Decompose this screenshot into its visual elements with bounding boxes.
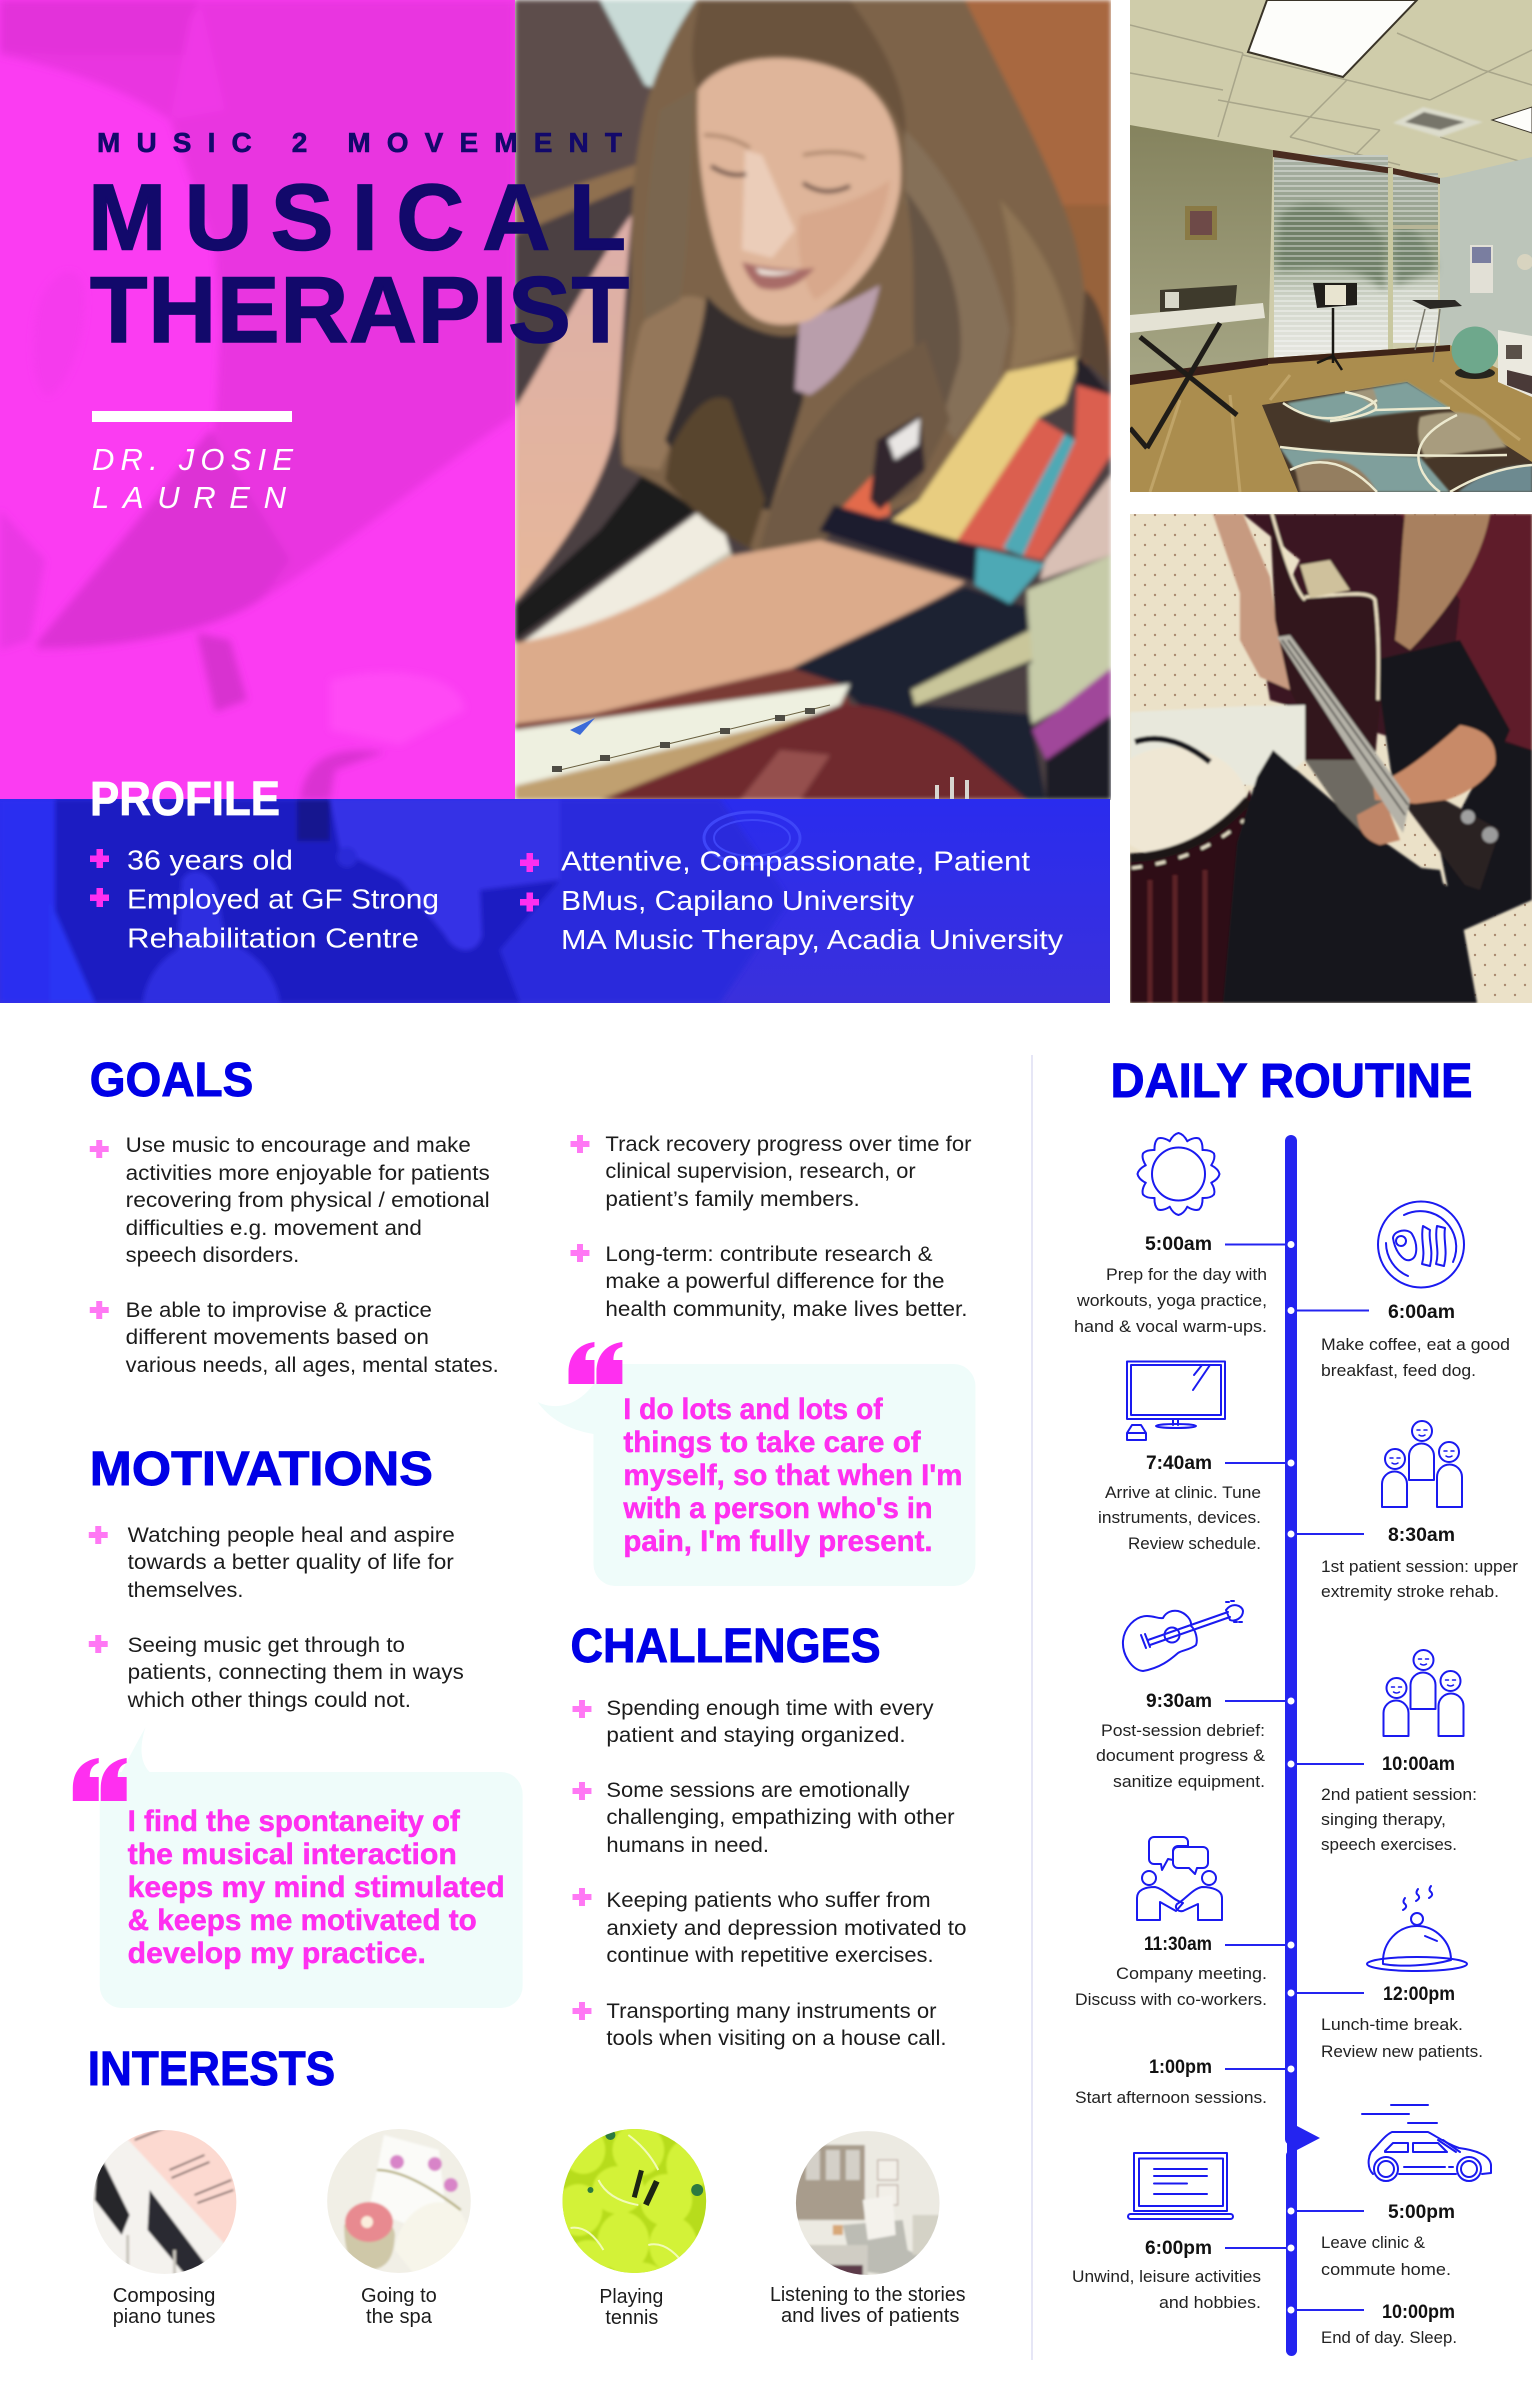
- heading: goals: GOALS: [90, 1054, 253, 1107]
- profile list: Employed at GF Strong: [127, 884, 439, 914]
- icon: meeting: [1137, 1837, 1222, 1920]
- item: 9:30am: [1096, 1691, 1266, 1791]
- item: 5:00pm: 5:00pm: [1388, 2202, 1455, 2223]
- profile list: Attentive, Compassionate, Patient: [561, 846, 1030, 876]
- item: 7:40am: Arrive at clinic. Tune: [1105, 1483, 1261, 1502]
- motivations list: patients, connecting them in ways: [128, 1661, 464, 1684]
- subtitle: MUSIC 2 MOVEMENT: [97, 127, 622, 158]
- panel: hero: [0, 0, 1111, 1003]
- item: 11:30am: Discuss with co-workers.: [1075, 1990, 1267, 2009]
- title: MUSICAL: [88, 164, 626, 270]
- item: 10:00pm: 10:00pm: [1382, 2302, 1455, 2323]
- profile list: Rehabilitation Centre: [127, 922, 419, 954]
- item: 5:00pm: commute home.: [1321, 2260, 1451, 2279]
- profile heading: PROFILE: [90, 773, 280, 826]
- item: 9:30am: document progress &: [1096, 1746, 1266, 1765]
- author name: DR. JOSIE: [92, 442, 293, 477]
- interest: stories: and lives of patients: [781, 2305, 959, 2327]
- quote: spontaneity: keeps my mind stimulated: [128, 1871, 505, 1904]
- goals list: Track recovery progress over time for: [605, 1133, 971, 1156]
- panel: daily routine: [1072, 1055, 1518, 2356]
- photo: therapy room: [1130, 0, 1532, 492]
- photo: woman playing autoharp: [515, 0, 1111, 800]
- item: 10:00am: speech exercises.: [1321, 1835, 1457, 1854]
- heading: challenges: CHALLENGES: [571, 1620, 881, 1673]
- icon: cloche: [1367, 1886, 1467, 1971]
- interest: spa: [324, 2125, 474, 2328]
- heading: motivations: MOTIVATIONS: [90, 1443, 433, 1496]
- panel: challenges: [571, 1620, 966, 2050]
- item: 6:00pm: [1072, 2238, 1261, 2312]
- interest: tennis: [562, 2129, 706, 2324]
- motivations list: towards a better quality of life for: [128, 1551, 454, 1574]
- challenges list: challenging, empathizing with other: [606, 1806, 955, 1829]
- item: 5:00am: workouts, yoga practice,: [1076, 1291, 1267, 1310]
- goals list: make a powerful difference for the: [605, 1270, 945, 1293]
- goals list: difficulties e.g. movement and: [126, 1217, 422, 1240]
- goals list: health community, make lives better.: [605, 1298, 967, 1321]
- goals list: Use music to encourage and make: [126, 1134, 471, 1157]
- item: 5:00pm: [1321, 2202, 1455, 2279]
- title: THERAPIST: [90, 257, 629, 362]
- icon: car: [1362, 2105, 1491, 2181]
- interest: spa: the spa: [366, 2306, 433, 2328]
- item: 8:30am: extremity stroke rehab.: [1321, 1582, 1499, 1601]
- interest: stories: [770, 2130, 965, 2327]
- item: 7:40am: [1098, 1453, 1261, 1553]
- profile list: [90, 844, 1063, 955]
- item: 10:00pm: [1321, 2302, 1457, 2347]
- item: 1:00pm: [1075, 2057, 1267, 2107]
- quote: taking care of myself: pain, I'm fully present.: [623, 1525, 933, 1558]
- title: [88, 164, 629, 362]
- panel: goals: [90, 1054, 971, 1377]
- item: 1:00pm: Start afternoon sessions.: [1075, 2088, 1267, 2107]
- item: 7:40am: instruments, devices.: [1098, 1508, 1261, 1527]
- goals list: speech disorders.: [126, 1244, 299, 1267]
- motivations list: themselves.: [128, 1579, 243, 1602]
- profile list: MA Music Therapy, Acadia University: [561, 924, 1063, 955]
- quote: taking care of myself: with a person who's in: [622, 1492, 933, 1525]
- panel: motivations: [89, 1443, 464, 1712]
- item: 6:00am: breakfast, feed dog.: [1321, 1361, 1476, 1380]
- photo: pink tinted patient: [0, 0, 515, 800]
- item: 12:00pm: 12:00pm: [1383, 1984, 1455, 2005]
- goals list: recovering from physical / emotional: [126, 1189, 490, 1212]
- timeline bar: [1285, 1135, 1320, 2356]
- item: 9:30am: sanitize equipment.: [1113, 1772, 1265, 1791]
- quote: taking care of myself: I do lots and lots of: [623, 1393, 884, 1426]
- interest: piano: piano tunes: [113, 2306, 215, 2328]
- item: 6:00am: [1321, 1302, 1510, 1380]
- challenges list: continue with repetitive exercises.: [606, 1944, 934, 1967]
- item: 6:00am: 6:00am: [1388, 1302, 1455, 1323]
- item: 8:30am: [1321, 1525, 1518, 1601]
- interest: spa: Going to: [361, 2285, 437, 2307]
- goals list: Long-term: contribute research &: [605, 1243, 933, 1266]
- motivations list: Watching people heal and aspire: [128, 1524, 455, 1547]
- profile list: BMus, Capilano University: [561, 885, 914, 916]
- item: 10:00pm: End of day. Sleep.: [1321, 2328, 1457, 2347]
- goals list: Be able to improvise & practice: [126, 1299, 432, 1322]
- challenges list: anxiety and depression motivated to: [606, 1917, 966, 1940]
- item: 11:30am: [1075, 1934, 1267, 2009]
- item: 10:00am: [1321, 1754, 1477, 1854]
- goals list: patient’s family members.: [605, 1188, 860, 1211]
- quote: spontaneity: & keeps me motivated to: [128, 1904, 477, 1937]
- item: 6:00pm: Unwind, leisure activities: [1072, 2267, 1261, 2286]
- item: 5:00pm: Leave clinic &: [1321, 2233, 1426, 2252]
- quote: spontaneity: I find the spontaneity of: [128, 1805, 461, 1838]
- quote: taking care of myself: myself, so that when I'm: [623, 1459, 962, 1492]
- heading: interests: INTERESTS: [88, 2043, 335, 2096]
- item: 5:00am: [1074, 1234, 1267, 1336]
- motivations list: which other things could not.: [127, 1689, 411, 1712]
- item: 7:40am: Review schedule.: [1128, 1534, 1261, 1553]
- author name: LAUREN: [92, 480, 287, 515]
- author name: [92, 442, 293, 515]
- item: 1:00pm: 1:00pm: [1149, 2057, 1212, 2078]
- quote: taking care of myself: [538, 1342, 975, 1586]
- icon: laptop: [1128, 2153, 1233, 2219]
- item: 9:30am: 9:30am: [1146, 1691, 1212, 1712]
- photo: guitar and drum: [1103, 514, 1532, 1003]
- challenges list: [573, 1697, 966, 2050]
- challenges list: patient and staying organized.: [606, 1724, 906, 1747]
- panel: profile band: [0, 799, 1110, 1003]
- challenges list: humans in need.: [606, 1834, 769, 1857]
- item: 5:00am: Prep for the day with: [1106, 1265, 1267, 1284]
- interest: piano: Composing: [113, 2285, 215, 2307]
- title rule: [92, 411, 292, 422]
- challenges list: tools when visiting on a house call.: [606, 2027, 947, 2050]
- item: 12:00pm: [1321, 1984, 1483, 2061]
- item: 10:00am: 10:00am: [1382, 1754, 1455, 1775]
- item: 10:00am: singing therapy,: [1321, 1810, 1446, 1829]
- item: 7:40am: 7:40am: [1146, 1453, 1212, 1474]
- connectors: [1225, 1241, 1369, 2314]
- profile list: 36 years old: [127, 844, 293, 876]
- item: 6:00pm: 6:00pm: [1145, 2238, 1212, 2259]
- challenges list: Some sessions are emotionally: [606, 1779, 910, 1802]
- interest: tennis: tennis: [605, 2307, 658, 2329]
- goals list: activities more enjoyable for patients: [126, 1162, 490, 1185]
- goals list: [90, 1133, 971, 1377]
- goals list: clinical supervision, research, or: [605, 1160, 916, 1183]
- item: 9:30am: Post-session debrief:: [1101, 1721, 1265, 1740]
- icon: monitor: [1127, 1362, 1225, 1440]
- icon: patients: [1382, 1421, 1462, 1507]
- goals list: different movements based on: [126, 1326, 429, 1349]
- item: 6:00am: Make coffee, eat a good: [1321, 1335, 1510, 1354]
- interest: stories: Listening to the stories: [770, 2284, 965, 2306]
- motivations list: Seeing music get through to: [128, 1634, 405, 1657]
- divider: [1031, 1055, 1033, 2360]
- item: 5:00am: hand & vocal warm-ups.: [1074, 1317, 1267, 1336]
- goals list: various needs, all ages, mental states.: [126, 1354, 499, 1377]
- quote: spontaneity: [73, 1727, 523, 2008]
- item: 8:30am: 1st patient session: upper: [1321, 1557, 1518, 1576]
- item: 12:00pm: Lunch-time break.: [1321, 2015, 1463, 2034]
- panel: interests: [88, 2043, 965, 2329]
- icon: breakfast plate: [1378, 1202, 1464, 1288]
- item: 10:00am: 2nd patient session:: [1321, 1785, 1477, 1804]
- item: 11:30am: 11:30am: [1144, 1934, 1212, 1955]
- quote: spontaneity: the musical interaction: [128, 1838, 457, 1871]
- challenges list: Transporting many instruments or: [606, 2000, 937, 2023]
- challenges list: Spending enough time with every: [606, 1697, 934, 1720]
- motivations list: [89, 1524, 464, 1712]
- icon: patients group: [1384, 1650, 1464, 1736]
- item: 8:30am: 8:30am: [1388, 1525, 1455, 1546]
- icon: sun: [1138, 1133, 1220, 1215]
- challenges list: Keeping patients who suffer from: [606, 1889, 931, 1912]
- item: 6:00pm: and hobbies.: [1159, 2293, 1261, 2312]
- quote: spontaneity: develop my practice.: [128, 1937, 426, 1970]
- interest: piano: [90, 2125, 239, 2328]
- item: 5:00am: 5:00am: [1145, 1234, 1212, 1255]
- heading: daily routine: DAILY ROUTINE: [1110, 1055, 1472, 1108]
- item: 12:00pm: Review new patients.: [1321, 2042, 1483, 2061]
- interest: tennis: Playing: [599, 2286, 663, 2308]
- icon: guitar: [1123, 1601, 1243, 1671]
- quote: taking care of myself: things to take care of: [623, 1426, 922, 1459]
- item: 11:30am: Company meeting.: [1116, 1964, 1267, 1983]
